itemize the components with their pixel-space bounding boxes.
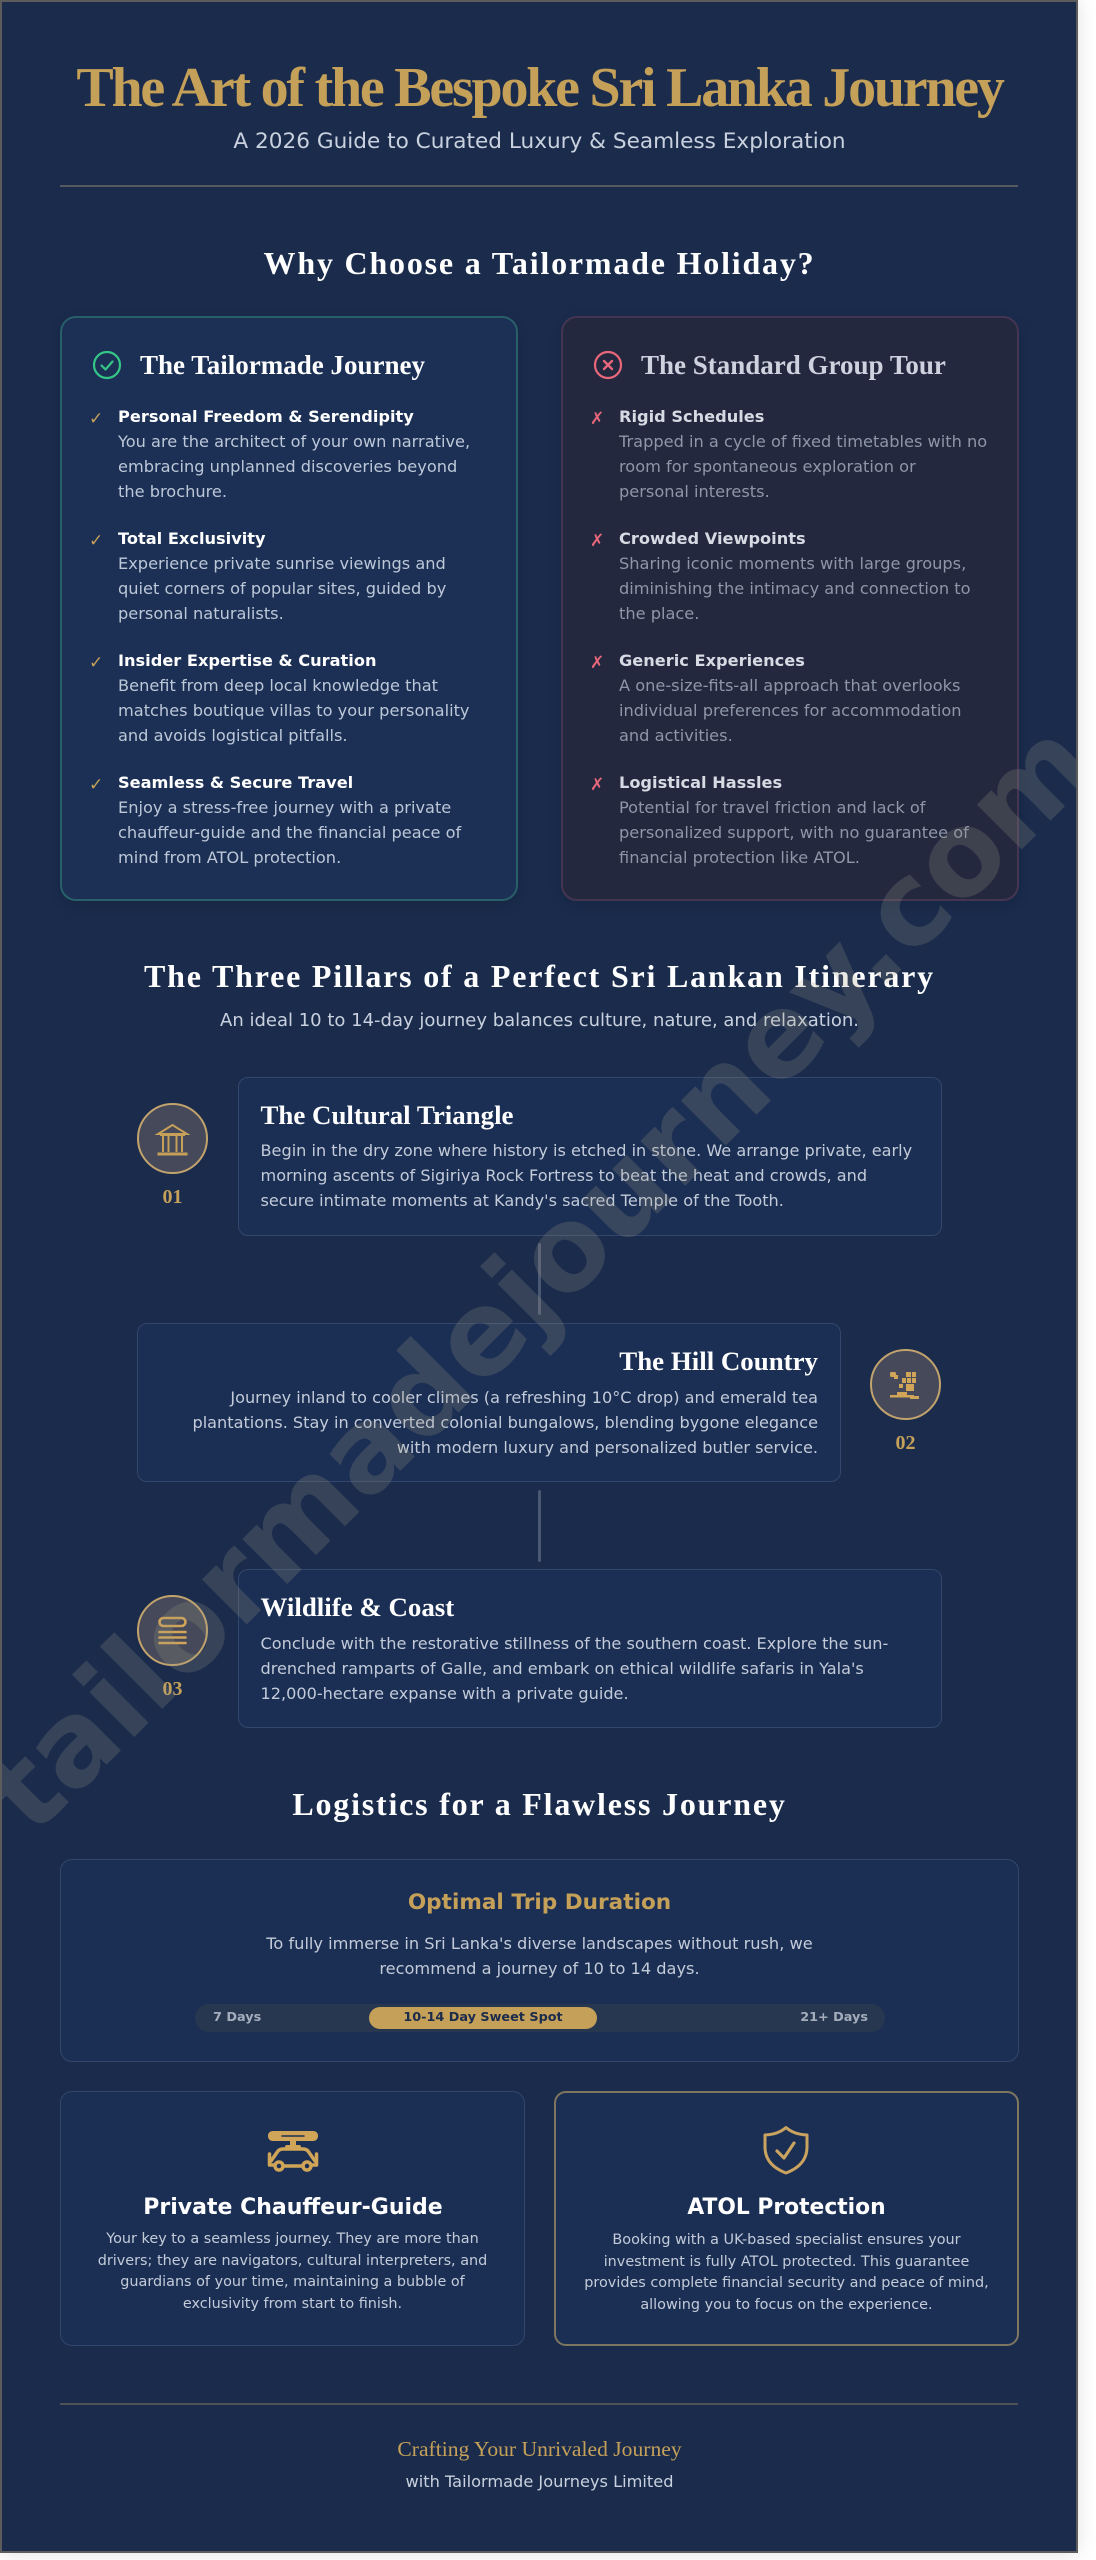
pillar text: plantations. Stay in converted colonial bungalows, blending bygone elegance: [192, 1413, 818, 1432]
item: total exclusivity: [89, 528, 446, 623]
item: crowded viewpoints: Crowded Viewpoints: [619, 528, 806, 548]
item: insider expertise: Benefit from deep local knowledge that: [118, 676, 438, 695]
item: crowded viewpoints: the place.: [619, 604, 699, 623]
item: logistical hassles: Potential for travel friction and lack of: [619, 798, 926, 817]
panel: atol protection: [554, 2091, 1019, 2346]
item: rigid schedules: ✗: [590, 408, 604, 428]
subtitle: A 2026 Guide to Curated Luxury & Seamless Exploration: [233, 129, 846, 154]
heading: logistics: Logistics for a Flawless Journey: [292, 1786, 787, 1822]
item: logistical hassles: Logistical Hassles: [619, 772, 782, 792]
footer: [397, 2437, 682, 2490]
item: insider expertise: [89, 650, 470, 745]
icon: cross circle: [594, 350, 622, 380]
item: generic experiences: individual preferences for accommodation: [619, 701, 962, 720]
pillar text: drenched ramparts of Galle, and embark on ethical wildlife safaris in Yala's: [260, 1659, 864, 1678]
panel text: [266, 1934, 813, 1978]
item: insider expertise: matches boutique villas to your personality: [118, 701, 470, 720]
icon: check circle: [92, 350, 122, 380]
item: crowded viewpoints: [590, 528, 970, 623]
pillar: the hill country: [137, 1323, 841, 1482]
panel text: Booking with a UK-based specialist ensures your: [612, 2232, 961, 2248]
panel text: To fully immerse in Sri Lanka's diverse landscapes without rush, we: [266, 1934, 813, 1953]
heading: three pillars: The Three Pillars of a Perfect Sri Lankan Itinerary: [144, 958, 935, 994]
panel heading: Private Chauffeur-Guide: [143, 2194, 443, 2220]
header: [76, 57, 1004, 154]
pillar text: secure intimate moments at Kandy's sacred Temple of the Tooth.: [260, 1191, 784, 1210]
pillar text: [260, 1634, 888, 1703]
item: total exclusivity: ✓: [89, 530, 103, 550]
pillar text: [260, 1141, 912, 1210]
item: rigid schedules: Trapped in a cycle of fixed timetables with no: [619, 432, 987, 451]
heading: why choose: Why Choose a Tailormade Holiday?: [264, 245, 815, 281]
pillar icon 03: layers: [137, 1595, 208, 1666]
pillar icon 02: tea: [870, 1349, 941, 1420]
item: seamless travel: mind from ATOL protection.: [118, 848, 341, 867]
item: generic experiences: A one-size-fits-all approach that overlooks: [619, 676, 960, 695]
panel text: recommend a journey of 10 to 14 days.: [379, 1959, 700, 1978]
panel text: drivers; they are navigators, cultural interpreters, and: [98, 2252, 487, 2268]
item: insider expertise: and avoids logistical pitfalls.: [118, 726, 348, 745]
number 03: 03: [162, 1678, 182, 1700]
panel: private chauffeur-guide: [60, 2091, 525, 2346]
item: personal freedom: the brochure.: [118, 482, 227, 501]
pillar text: morning ascents of Sigiriya Rock Fortress to beat the heat and crowds, and: [260, 1166, 867, 1185]
panel text: [98, 2231, 487, 2312]
item: logistical hassles: [590, 772, 970, 867]
connector: [538, 1243, 540, 1315]
item: crowded viewpoints: diminishing the intimacy and connection to: [619, 579, 970, 598]
panel text: provides complete financial security and peace of mind,: [584, 2275, 989, 2291]
label: 7 days: 7 Days: [213, 2010, 261, 2024]
item: total exclusivity: Experience private sunrise viewings and: [118, 554, 446, 573]
item: total exclusivity: quiet corners of popular sites, guided by: [118, 579, 446, 598]
item: seamless travel: ✓: [89, 774, 103, 794]
item: rigid schedules: personal interests.: [619, 482, 770, 501]
panel heading: The Tailormade Journey: [140, 350, 425, 380]
number 01: 01: [162, 1186, 182, 1208]
pillar title: The Cultural Triangle: [260, 1100, 514, 1130]
pillar text: 12,000-hectare expanse with a private guide.: [260, 1684, 629, 1703]
pillar: wildlife and coast: [238, 1569, 942, 1728]
item: seamless travel: chauffeur-guide and the financial peace of: [118, 823, 461, 842]
icon: shield check: [764, 2126, 808, 2174]
panel text: allowing you to focus on the experience.: [640, 2296, 933, 2312]
panel: the tailormade journey: [60, 316, 518, 901]
panel text: exclusivity from start to finish.: [183, 2296, 402, 2312]
panel: the standard group tour: [561, 316, 1019, 901]
panel text: [584, 2232, 989, 2312]
highlighted range: sweet spot: [369, 2006, 597, 2028]
pillar text: Journey inland to cooler climes (a refreshing 10°C drop) and emerald tea: [230, 1388, 818, 1407]
pillar text: Begin in the dry zone where history is etched in stone. We arrange private, early: [260, 1141, 912, 1160]
item: generic experiences: ✗: [590, 652, 604, 672]
panel heading: ATOL Protection: [687, 2195, 886, 2220]
number 02: 02: [896, 1432, 916, 1454]
item: generic experiences: and activities.: [619, 726, 733, 745]
item: seamless travel: [89, 772, 462, 867]
pillar text: with modern luxury and personalized butler service.: [397, 1438, 818, 1457]
item: logistical hassles: ✗: [590, 774, 604, 794]
panel text: investment is fully ATOL protected. This guarantee: [604, 2254, 969, 2270]
item: personal freedom: ✓: [89, 408, 103, 428]
panel heading: The Standard Group Tour: [641, 350, 946, 380]
label: 21+ days: 21+ Days: [800, 2010, 868, 2024]
pillar title: The Hill Country: [619, 1346, 818, 1376]
footer title: Crafting Your Unrivaled Journey: [397, 2437, 682, 2461]
duration bar: [195, 2004, 885, 2032]
item: rigid schedules: Rigid Schedules: [619, 406, 764, 426]
item: seamless travel: Seamless & Secure Travel: [118, 772, 353, 792]
pillar title: Wildlife & Coast: [260, 1592, 454, 1622]
item: seamless travel: Enjoy a stress-free journey with a private: [118, 798, 451, 817]
pillars subtitle: An ideal 10 to 14-day journey balances culture, nature, and relaxation.: [220, 1010, 859, 1031]
item: personal freedom: embracing unplanned discoveries beyond: [118, 457, 457, 476]
icon: chauffeur car: [268, 2131, 318, 2172]
item: logistical hassles: personalized support, with no guarantee of: [619, 823, 969, 842]
item: total exclusivity: Total Exclusivity: [118, 528, 266, 548]
item: insider expertise: Insider Expertise & Curation: [118, 650, 376, 670]
item: personal freedom: Personal Freedom & Serendipity: [118, 406, 414, 426]
item: insider expertise: ✓: [89, 652, 103, 672]
item: personal freedom: You are the architect of your own narrative,: [118, 432, 470, 451]
item: total exclusivity: personal naturalists.: [118, 604, 284, 623]
connector: [538, 1490, 540, 1562]
pillar text: Conclude with the restorative stillness of the southern coast. Explore the sun-: [260, 1634, 888, 1653]
panel: optimal trip duration: [60, 1859, 1019, 2062]
panel heading: Optimal Trip Duration: [408, 1890, 671, 1915]
highlighted range: sweet spot: 10-14 Day Sweet Spot: [403, 2010, 563, 2024]
item: generic experiences: Generic Experiences: [619, 650, 805, 670]
item: crowded viewpoints: ✗: [590, 530, 604, 550]
item: rigid schedules: room for spontaneous exploration or: [619, 457, 916, 476]
item: crowded viewpoints: Sharing iconic moments with large groups,: [619, 554, 966, 573]
pillar text: [192, 1388, 818, 1457]
title: The Art of the Bespoke Sri Lanka Journey: [76, 57, 1003, 119]
panel text: guardians of your time, maintaining a bubble of: [120, 2274, 465, 2290]
item: generic experiences: [590, 650, 962, 745]
pillar: the cultural triangle: [238, 1077, 942, 1236]
pillar icon 01: temple: [137, 1103, 208, 1174]
item: logistical hassles: financial protection like ATOL.: [619, 848, 860, 867]
item: rigid schedules: [590, 406, 987, 501]
footer company: with Tailormade Journeys Limited: [405, 2472, 674, 2490]
item: personal freedom: [89, 406, 470, 501]
panel text: Your key to a seamless journey. They are more than: [106, 2231, 479, 2247]
